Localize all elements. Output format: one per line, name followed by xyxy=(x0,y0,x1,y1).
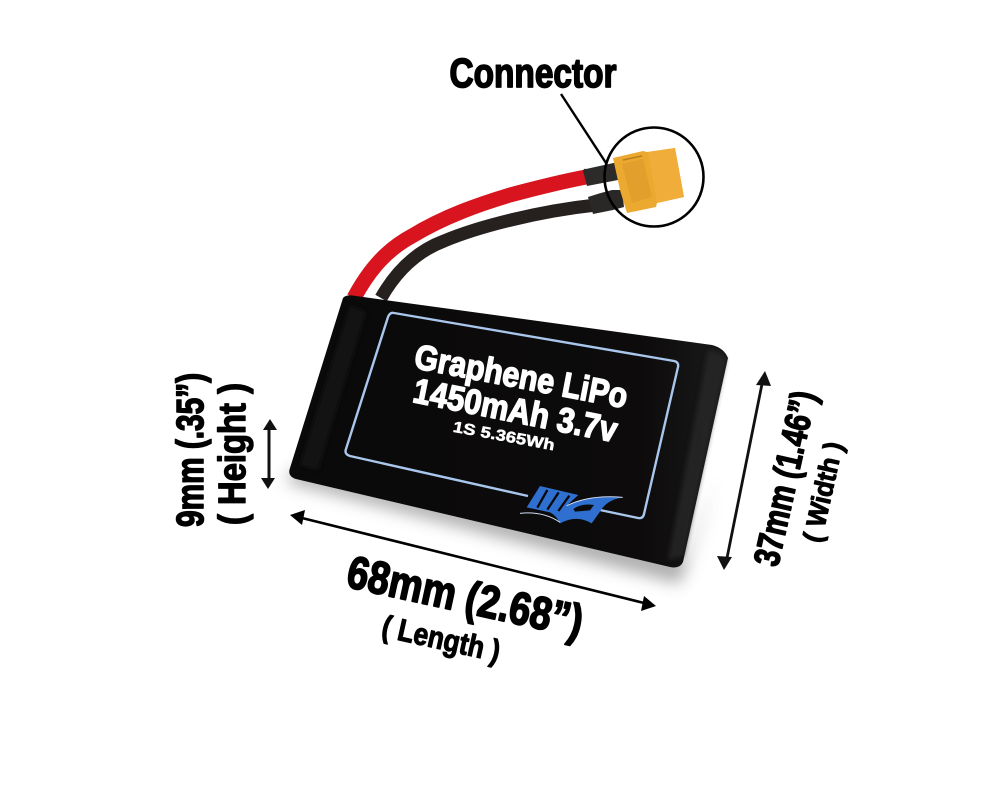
battery cell and energy rating: 1S 5.365Wh xyxy=(452,419,556,454)
length arrow xyxy=(290,510,656,611)
width dimension xyxy=(717,371,849,570)
side edge shading xyxy=(668,350,726,560)
connector leader line xyxy=(561,94,606,163)
width measurement: 37mm (1.46”) xyxy=(745,387,824,570)
width caption: ( Width ) xyxy=(797,439,849,545)
height caption: ( Height ) xyxy=(212,383,254,525)
wires xyxy=(354,162,624,298)
height measurement: 9mm (.35”) xyxy=(170,373,212,527)
length dimension xyxy=(290,510,656,669)
label frame xyxy=(346,313,678,518)
width arrow xyxy=(717,371,771,570)
length caption: ( Length ) xyxy=(379,609,504,669)
battery title: Graphene LiPo xyxy=(411,337,631,416)
icon: yellow XT60 connector xyxy=(613,148,684,213)
battery shadow xyxy=(286,468,716,584)
black wire xyxy=(381,205,596,298)
icon: MVA logo xyxy=(520,486,623,523)
battery body xyxy=(289,295,728,567)
connector label: Connector xyxy=(450,50,617,96)
height arrow xyxy=(261,419,277,489)
length measurement: 68mm (2.68”) xyxy=(343,545,588,647)
heat shrink sleeves xyxy=(583,162,618,186)
red wire xyxy=(354,177,586,298)
battery capacity and voltage: 1450mAh 3.7v xyxy=(410,371,621,450)
connector highlight circle xyxy=(604,128,704,226)
height dimension xyxy=(170,373,277,527)
battery xyxy=(289,295,728,567)
